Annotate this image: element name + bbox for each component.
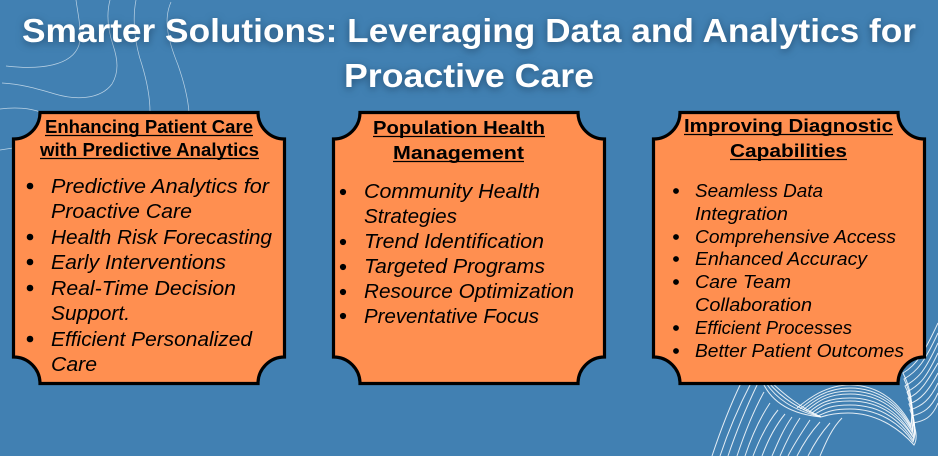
decorative contour lines, top left [0,0,189,150]
decorative wave, bottom right [712,323,938,456]
bullet list: Resource Optimization [364,281,574,303]
panel heading: Capabilities [730,141,847,161]
bullet list: Preventative Focus [364,306,539,328]
panel shape [14,112,284,384]
bullet list: Proactive Care [51,201,192,223]
bullet list: Trend Identification [364,231,544,253]
panel heading [373,118,545,163]
panel heading: Improving Diagnostic [684,116,893,136]
panel heading: Management [393,143,524,163]
bullet list: Care [51,354,97,376]
panel heading [684,116,893,161]
bullet list: Enhanced Accuracy [695,249,868,269]
bullet list: Strategies [364,206,457,228]
bullet list: Predictive Analytics for [51,176,270,198]
title: Proactive Care [344,57,594,94]
panel heading: with Predictive Analytics [39,140,259,160]
bullet list: Real-Time Decision [51,278,236,300]
bullet list: Comprehensive Access [695,227,896,247]
bullet list [340,181,574,328]
bullet list [27,176,272,376]
bullet list: Care Team [695,272,791,292]
bullet list: Efficient Personalized [51,329,253,351]
bullet list: Community Health [364,181,540,203]
panel heading: Enhancing Patient Care [45,117,253,137]
panel: population health management [334,112,604,384]
bullet list: Seamless Data [695,181,823,201]
panel heading [39,117,259,160]
panel shape [334,112,604,384]
panel: improving diagnostic capabilities [654,112,924,384]
title [22,12,916,94]
bullet list: Integration [695,204,788,224]
bullet list [673,181,904,361]
bullet list: Efficient Processes [695,318,852,338]
bullet list: Support. [51,303,130,325]
bullet list: Targeted Programs [364,256,545,278]
panel heading: Population Health [373,118,545,138]
bullet list: Collaboration [695,295,812,315]
bullet list: Early Interventions [51,252,226,274]
panel: enhancing patient care [14,112,284,384]
bullet list: Better Patient Outcomes [695,341,904,361]
title: Smarter Solutions: Leveraging Data and Analytics for [22,12,916,49]
panel shape [654,112,924,384]
bullet list: Health Risk Forecasting [51,227,272,249]
